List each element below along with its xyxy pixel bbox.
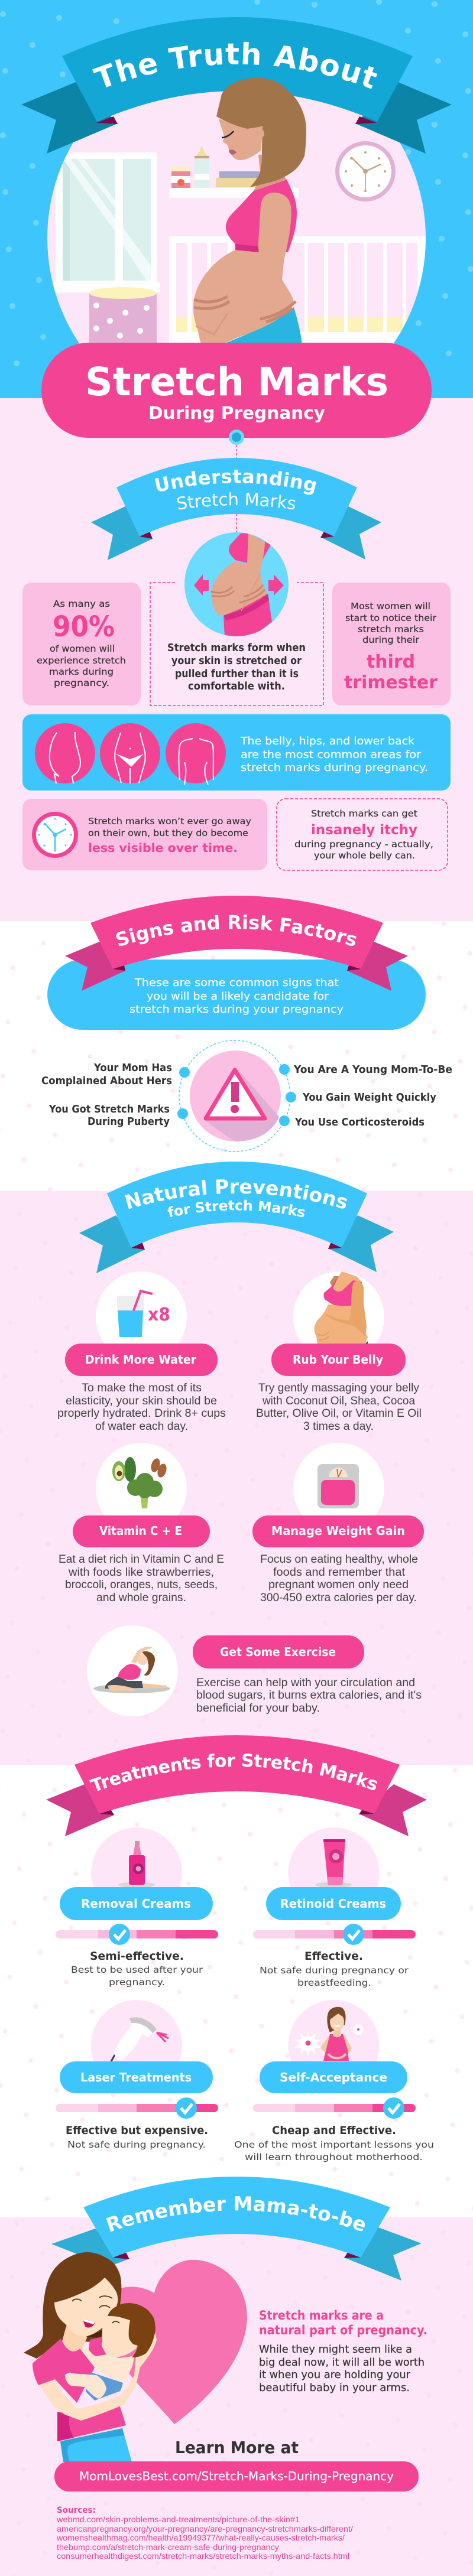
card: drink more water: properly hydrated. Drink 8+ cups — [57, 1407, 226, 1420]
card: rub your belly: Try gently massaging your belly — [258, 1382, 420, 1394]
card: self-acceptance: Cheap and Effective. — [272, 2124, 396, 2137]
closing message: it when you are holding your — [259, 2369, 411, 2381]
polka dot stool — [89, 287, 157, 344]
card: self-acceptance: One of the most important lessons you — [234, 2139, 434, 2150]
panel: third trimester: Most women will — [351, 601, 430, 612]
crib — [169, 236, 426, 343]
left risk factors — [41, 1062, 172, 1128]
sources: Sources: — [57, 2506, 96, 2515]
heading: Signs and Risk Factors — [116, 915, 357, 946]
heading line one: Understanding — [155, 469, 316, 495]
heading: Treatments for Stretch Marks — [89, 1754, 377, 1791]
panel: common areas — [22, 714, 451, 791]
rating slider — [56, 1924, 218, 1945]
left risk factors: Your Mom Has — [93, 1062, 172, 1074]
panel: signs intro — [47, 960, 426, 1030]
sources: webmd.com/skin-problems-and-treatments/picture-of-the-skin#1 — [56, 2515, 300, 2524]
card: rub your belly: Butter, Olive Oil, or Vitamin E Oil — [256, 1407, 422, 1420]
sources — [56, 2506, 353, 2561]
heart — [101, 2260, 247, 2424]
panel: third trimester: during their — [362, 635, 420, 645]
panel: 90 percent: experience stretch — [37, 655, 126, 666]
panel: less visible over time — [22, 799, 267, 870]
heading line one: Natural Preventions — [125, 1179, 347, 1209]
rating slider — [56, 2097, 218, 2119]
card: get some exercise — [87, 1625, 422, 1716]
panel: 90 percent: 90% — [53, 610, 115, 643]
panel: 90 percent — [22, 583, 141, 705]
card: laser treatments: Not safe during pregnancy. — [67, 2139, 206, 2150]
panel: how stretch marks form: pulled further than it is — [175, 668, 299, 680]
card: removal creams — [56, 1827, 218, 1988]
ribbon: signs and risk factors — [65, 896, 408, 991]
heading: Remember Mama-to-be — [106, 2196, 365, 2232]
card: vitamin c and e: Eat a diet rich in Vitamin C and E — [59, 1553, 224, 1566]
ribbon: natural preventions — [79, 1162, 394, 1273]
sources: thebump.com/a/stretch-mark-cream-safe-during-pregnancy — [57, 2542, 279, 2552]
panel: insanely itchy — [277, 799, 448, 870]
left risk factors: You Got Stretch Marks — [48, 1103, 170, 1115]
common areas text: are the most common areas for — [241, 749, 422, 761]
right risk factors — [293, 1063, 452, 1128]
icon: bathroom scale — [318, 1464, 359, 1508]
card: manage weight gain: 300-450 extra calories per day. — [260, 1592, 417, 1604]
icon: stretching woman — [93, 1647, 170, 1693]
card: removal creams: Semi-effective. — [90, 1950, 184, 1963]
card: removal creams: Best to be used after your — [71, 1964, 203, 1975]
icon: lower back — [166, 723, 226, 785]
card: rub your belly — [256, 1271, 422, 1433]
card: laser treatments: Effective but expensive. — [66, 2124, 208, 2137]
title main line: Stretch Marks — [85, 359, 388, 405]
left risk factors: Complained About Hers — [41, 1075, 172, 1087]
icon: healthy foods — [112, 1457, 168, 1508]
card: retinoid creams: Not safe during pregnancy or — [260, 1965, 409, 1976]
card: laser treatments — [56, 2000, 218, 2150]
panel: signs intro: you will be a likely candidate for — [147, 990, 329, 1003]
panel: signs intro: These are some common signs that — [134, 977, 339, 989]
card: retinoid creams: Effective. — [304, 1950, 363, 1963]
sources: consumerhealthdigest.com/stretch-marks/stretch-marks-myths-and-facts.html — [57, 2551, 349, 2561]
card: self-acceptance: Self-Acceptance — [280, 2070, 387, 2084]
icon: waist front — [100, 723, 160, 783]
panel: 90 percent: As many as — [53, 599, 110, 609]
panel: 90 percent: pregnancy. — [54, 678, 109, 688]
shelf with jar, bottle and books — [169, 145, 299, 198]
panel: less visible over time: less visible over time. — [88, 841, 238, 855]
icon: glass of water — [117, 1291, 170, 1337]
icon: stretched belly — [184, 532, 289, 637]
pregnant woman — [193, 77, 306, 344]
icon: laser device — [111, 2017, 169, 2061]
sources: americanpregnancy.org/your-pregnancy/are-pregnancy-stretchmarks-different/ — [57, 2524, 353, 2533]
panel: insanely itchy: during pregnancy - actually, — [294, 839, 433, 850]
card: vitamin c and e: broccoli, oranges, nuts, seeds, — [65, 1579, 218, 1591]
sources: womenshealthmag.com/health/a19949377/what-really-causes-stretch-marks/ — [56, 2533, 345, 2542]
window — [52, 152, 160, 292]
card: manage weight gain: Focus on eating healthy, whole — [260, 1553, 418, 1566]
card: removal creams: Removal Creams — [81, 1897, 191, 1911]
warning diagram — [177, 1040, 296, 1152]
subtitle: During Pregnancy — [148, 403, 325, 423]
common areas text: stretch marks during pregnancy. — [241, 762, 428, 774]
card: self-acceptance — [234, 2000, 434, 2162]
icon: hips from the side — [35, 723, 95, 783]
panel: 90 percent: marks during — [49, 666, 114, 677]
icon: spray bottle — [118, 1839, 155, 1888]
panel: insanely itchy: insanely itchy — [311, 822, 417, 838]
card: manage weight gain — [252, 1443, 424, 1604]
panel: third trimester: start to notice their — [345, 613, 437, 623]
card: self-acceptance: will learn throughout motherhood. — [245, 2152, 423, 2162]
card: rub your belly: with Coconut Oil, Shea, Cocoa — [262, 1395, 415, 1407]
heading line two: Stretch Marks — [177, 492, 296, 509]
panel: insanely itchy: your whole belly can. — [314, 850, 415, 861]
closing message: While they might seem like a — [259, 2343, 412, 2356]
title pill — [41, 343, 432, 438]
common areas text — [240, 735, 428, 774]
closing message: big deal now, it will all be worth — [259, 2356, 425, 2369]
icon: clock — [32, 812, 78, 858]
card: vitamin c and e: with foods like strawberries, — [68, 1566, 214, 1579]
panel: third trimester: stretch marks — [358, 624, 424, 635]
panel: 90 percent: of women will — [50, 643, 115, 654]
card: vitamin c and e: and whole grains. — [96, 1592, 186, 1604]
card: retinoid creams: Retinoid Creams — [280, 1897, 386, 1911]
card: retinoid creams — [253, 1827, 416, 1988]
card: laser treatments: Laser Treatments — [80, 2070, 192, 2084]
title text: The Truth About — [92, 41, 377, 89]
card: retinoid creams: breastfeeding. — [297, 1977, 371, 1988]
ribbon: remember mama-to-be — [51, 2177, 422, 2281]
card: drink more water: elasticity, your skin should be — [66, 1395, 217, 1407]
title ribbon — [21, 17, 452, 154]
ribbon: understanding stretch marks — [91, 458, 381, 560]
card: rub your belly: Rub Your Belly — [293, 1352, 383, 1367]
right risk factors: You Gain Weight Quickly — [302, 1091, 436, 1104]
panel: signs intro: stretch marks during your pregnancy — [129, 1003, 344, 1016]
card: drink more water — [57, 1271, 226, 1433]
closing message: Stretch marks are a — [259, 2308, 384, 2323]
card: get some exercise: Exercise can help with your circulation and — [196, 1677, 415, 1689]
panel: less visible over time: on their own, but they do become — [88, 828, 248, 838]
card: get some exercise: blood sugars, it burns extra calories, and it's — [196, 1689, 422, 1702]
closing message: natural part of pregnancy. — [259, 2323, 427, 2337]
panel: how stretch marks form: comfortable with. — [188, 680, 285, 692]
panel: how stretch marks form: Stretch marks form when — [167, 642, 306, 654]
card: manage weight gain: foods and remember that — [273, 1566, 406, 1579]
heading line two: for Stretch Marks — [167, 1199, 305, 1217]
panel: third trimester: third — [367, 652, 415, 672]
connector dot — [229, 430, 244, 458]
ribbon: treatments — [46, 1735, 427, 1836]
card: drink more water: Drink More Water — [85, 1352, 196, 1367]
card: vitamin c and e: Vitamin C + E — [99, 1524, 182, 1538]
icon: cream tube — [315, 1839, 352, 1888]
card: get some exercise: beneficial for your baby. — [196, 1702, 320, 1715]
icon: warning triangle — [206, 1070, 265, 1118]
panel: insanely itchy: Stretch marks can get — [311, 808, 417, 819]
card: drink more water: To make the most of its — [82, 1382, 202, 1394]
panel: how stretch marks form — [150, 532, 323, 705]
hero background dots — [0, 0, 473, 366]
card: get some exercise: Get Some Exercise — [220, 1645, 336, 1659]
icon: happy woman with flowers — [294, 2007, 364, 2061]
mother and baby illustration — [24, 2252, 157, 2462]
hero circle: nursery room — [47, 91, 426, 344]
panel: third trimester — [332, 583, 451, 705]
panel: third trimester: trimester — [344, 672, 438, 693]
wall clock — [335, 141, 396, 201]
learn more heading: Learn More at — [175, 2438, 299, 2457]
right risk factors: You Use Corticosteroids — [294, 1116, 425, 1128]
right risk factors: You Are A Young Mom-To-Be — [293, 1063, 452, 1076]
rating slider — [253, 1924, 416, 1945]
card: manage weight gain: pregnant women only need — [268, 1579, 409, 1591]
card: drink more water: of water each day. — [95, 1420, 188, 1433]
panel: less visible over time: Stretch marks won’t ever go away — [88, 816, 251, 827]
left risk factors: During Puberty — [88, 1115, 170, 1128]
panel: how stretch marks form: your skin is stretched or — [171, 655, 302, 667]
closing message — [259, 2308, 427, 2394]
icon: glass of water: x8 — [148, 1305, 170, 1325]
rating slider — [253, 2097, 416, 2119]
card: manage weight gain: Manage Weight Gain — [271, 1524, 405, 1538]
link pill — [54, 2461, 419, 2492]
link pill: MomLovesBest.com/Stretch-Marks-During-Pregnancy — [79, 2469, 394, 2483]
common areas text: The belly, hips, and lower back — [240, 735, 415, 747]
closing message: beautiful baby in your arms. — [259, 2382, 410, 2394]
card: vitamin c and e — [59, 1443, 224, 1604]
card: removal creams: pregnancy. — [109, 1977, 165, 1988]
card: rub your belly: 3 times a day. — [303, 1420, 374, 1433]
icon: belly figure — [315, 1271, 368, 1345]
